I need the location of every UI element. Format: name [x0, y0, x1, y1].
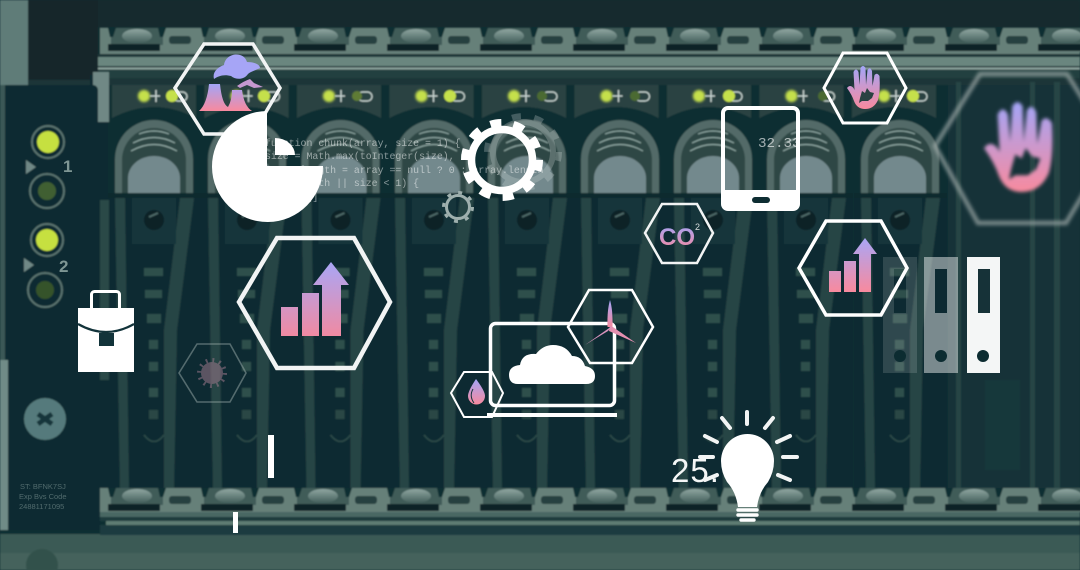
- rack panel labels: 1: [63, 157, 72, 176]
- rack panel labels: ST: BFNK7SJ: [20, 482, 66, 491]
- rack panel labels: 2: [59, 257, 68, 276]
- bar chart hexagon, small: [799, 221, 907, 315]
- data number 32.33: 32.33: [758, 136, 801, 152]
- CO2 hexagon: [645, 204, 713, 263]
- blurred large hand hexagon: [935, 74, 1080, 223]
- rack panel labels: Exp Bvs Code: [19, 492, 67, 501]
- rack panel labels: 24881171095: [19, 502, 64, 511]
- briefcase icon: [78, 292, 134, 372]
- code snippet overlay: return []: [265, 192, 318, 203]
- light bulb icon: [700, 412, 797, 520]
- binders icon: [883, 257, 1000, 373]
- code snippet overlay: [265, 138, 544, 203]
- bar chart hexagon, large: [239, 238, 390, 368]
- pie chart icon: [212, 111, 323, 222]
- water drop hexagon: [451, 372, 503, 417]
- small gear icon: [444, 192, 472, 222]
- CO2 hexagon: 2: [695, 222, 700, 232]
- code snippet overlay: const length = array == null ? 0 : array.length: [265, 165, 544, 176]
- factory hexagon icon: [175, 44, 280, 134]
- code snippet overlay: function chunk(array, size = 1) {: [265, 138, 461, 149]
- laptop with cloud icon: [487, 324, 617, 417]
- large gear icon: [465, 116, 559, 197]
- CO2 hexagon: CO: [659, 224, 695, 251]
- faded sun hexagon: [179, 344, 246, 402]
- hand hexagon icon: [824, 53, 906, 123]
- code snippet overlay: size = Math.max(toInteger(size), 0): [265, 151, 472, 162]
- code snippet overlay: if (!length || size < 1) {: [265, 178, 419, 189]
- wind turbine hexagon: [568, 290, 653, 363]
- tablet icon: [723, 108, 798, 209]
- data number 25.: 25.: [671, 452, 720, 489]
- white vertical ticks: [233, 435, 274, 533]
- rack panel labels: [19, 157, 72, 511]
